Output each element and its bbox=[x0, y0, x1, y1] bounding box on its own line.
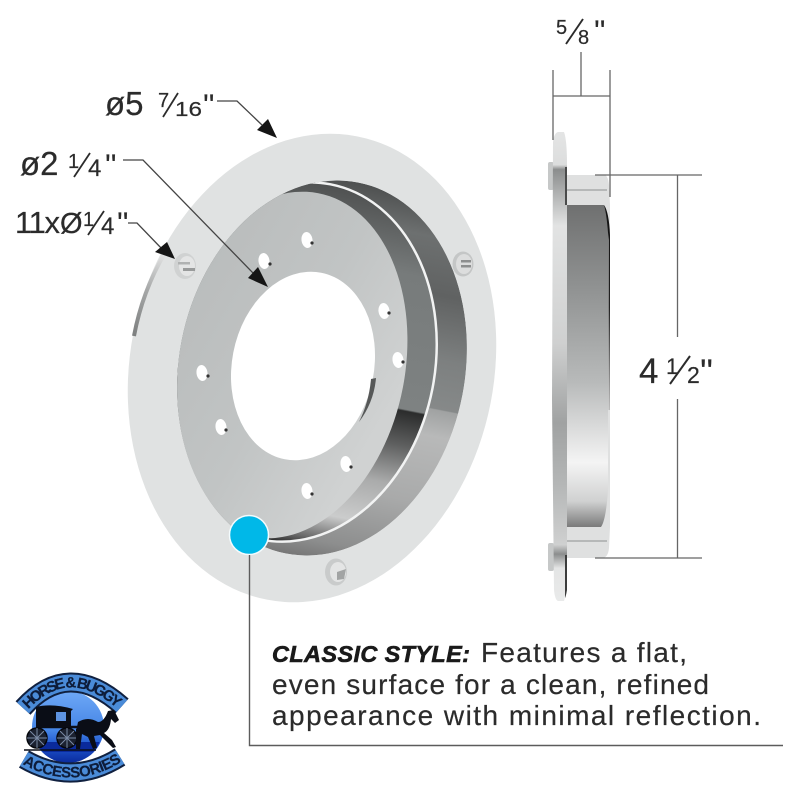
chrome face side bbox=[565, 205, 608, 527]
dimension: outer diameter 5 7/16: 7 bbox=[158, 90, 169, 112]
dimension: opening diameter 2 1/4: 4 bbox=[88, 155, 101, 182]
carriage wheels bbox=[27, 728, 77, 748]
inner edge shadow on opening bbox=[359, 378, 376, 422]
callout text: CLASSIC STYLE: bbox=[272, 641, 470, 667]
dimension: opening diameter 2 1/4: ø2 bbox=[20, 145, 59, 182]
logo bottom banner bbox=[24, 757, 120, 773]
ground line bbox=[24, 749, 96, 751]
dimension lines: depth 5/8: '' bbox=[594, 15, 605, 48]
dimension: bolt holes 11 x 1/4: 11x bbox=[15, 205, 60, 240]
cup body side bbox=[565, 175, 610, 558]
flange shadow strips bbox=[565, 167, 567, 205]
logo sky disc bbox=[32, 691, 104, 763]
bolt: upper left bbox=[174, 253, 196, 279]
collar grooves bbox=[565, 189, 607, 191]
dimension: bolt holes 11 x 1/4: 4 bbox=[101, 213, 114, 240]
shaded edge of flange bbox=[134, 248, 168, 336]
dimension lines: height 4 1/2: 2 bbox=[687, 362, 700, 388]
white rim highlight and inner wall bbox=[177, 182, 438, 543]
outer chrome band bbox=[265, 180, 467, 556]
bolt: bottom bbox=[325, 558, 347, 586]
outer flange disc bbox=[88, 102, 536, 634]
dimension: opening diameter 2 1/4 bbox=[20, 145, 268, 287]
dimension: opening diameter 2 1/4: '' bbox=[105, 149, 116, 182]
center opening bbox=[215, 259, 391, 473]
logo: Horse and Buggy Accessories bbox=[16, 672, 129, 783]
dimension lines: depth 5/8: 5 bbox=[556, 17, 567, 39]
dimension lines: height 4 1/2: 1 bbox=[666, 354, 678, 379]
panel: front view of flange ring bbox=[128, 134, 496, 602]
logo top text: HORSE & BUGGY bbox=[22, 677, 123, 709]
callout text bbox=[272, 637, 761, 731]
dimension: bolt holes 11 x 1/4 bbox=[15, 205, 175, 259]
dimension: bolt holes 11 x 1/4: Ø bbox=[60, 208, 83, 240]
dimension lines: depth 5/8: 8 bbox=[578, 27, 589, 49]
horse bbox=[76, 710, 119, 749]
dimension: outer diameter 5 7/16: ø5 bbox=[105, 85, 144, 122]
bolt: upper right bbox=[452, 252, 474, 276]
mounting holes in face bbox=[195, 231, 405, 500]
callout text: appearance with minimal reflection. bbox=[272, 700, 761, 731]
callout text: Features a flat, bbox=[481, 637, 687, 668]
callout leader line bbox=[250, 555, 783, 746]
dimension lines: height 4 1/2: '' bbox=[700, 353, 713, 391]
dimension: outer diameter 5 7/16 bbox=[105, 85, 277, 138]
dimension: opening diameter 2 1/4: 1 bbox=[68, 151, 79, 173]
flat inner face bbox=[177, 192, 408, 538]
panel: side view of flange bbox=[548, 132, 610, 601]
logo bottom text: ACCESSORIES bbox=[22, 754, 120, 778]
dimension: outer diameter 5 7/16: 16 bbox=[175, 99, 202, 121]
callout marker: blue dot bbox=[230, 516, 268, 554]
logo ground band bbox=[40, 742, 100, 752]
dimension lines: height 4 1/2: 4 bbox=[639, 352, 658, 391]
dimension lines: depth 5/8 bbox=[553, 15, 610, 197]
carriage bbox=[36, 705, 73, 727]
dimension: bolt holes 11 x 1/4: 1 bbox=[83, 209, 94, 231]
recessed cup bbox=[177, 180, 467, 556]
dark edge sliver bbox=[604, 205, 610, 410]
dimension lines: height 4 1/2 bbox=[595, 175, 713, 558]
dimension: outer diameter 5 7/16: '' bbox=[203, 89, 214, 122]
dimension: bolt holes 11 x 1/4: '' bbox=[117, 207, 128, 240]
callout text: even surface for a clean, refined bbox=[272, 669, 709, 700]
bolt heads side bbox=[548, 162, 554, 190]
logo top banner bbox=[23, 682, 122, 708]
flange side bbox=[552, 132, 567, 601]
